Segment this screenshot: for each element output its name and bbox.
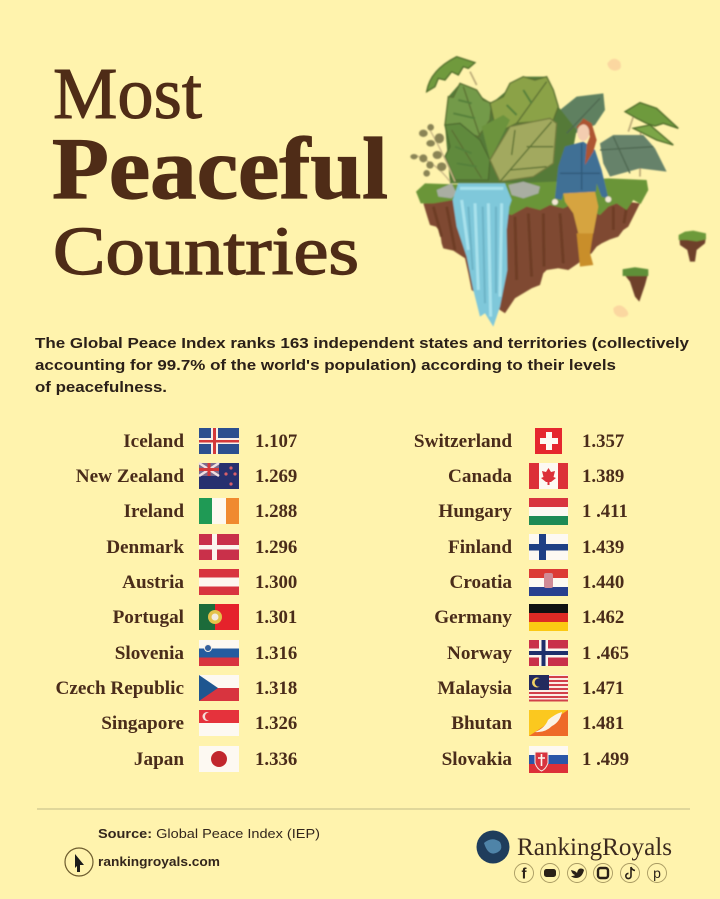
icon: pinterest — [648, 864, 666, 882]
big leaves — [445, 83, 492, 137]
icon: instagram — [594, 864, 612, 882]
waterfall — [453, 183, 512, 327]
row: Ireland — [124, 498, 297, 524]
row: Germany — [434, 604, 624, 631]
row: Hungary — [438, 498, 628, 525]
row: Canada: 1.389 — [582, 466, 624, 487]
row: Singapore — [101, 710, 297, 736]
row: Canada: Canada — [448, 466, 512, 487]
trousers — [563, 192, 598, 233]
row: Czech Republic — [56, 675, 297, 701]
intro text: accounting for 99.7% of the world's population) according to their levels — [35, 357, 616, 374]
leaf veins — [452, 82, 553, 182]
rocks — [437, 182, 540, 198]
icon: pinterest: p — [653, 865, 661, 881]
row: Bhutan: Bhutan — [451, 713, 512, 734]
title — [52, 53, 388, 289]
row: Switzerland — [414, 428, 624, 454]
brand name: RankingRoyals — [517, 834, 672, 861]
row: Czech Republic: 1.318 — [255, 678, 297, 699]
row: Slovakia: 1 .499 — [582, 749, 629, 770]
row: Denmark — [106, 534, 297, 560]
row: Czech Republic: Czech Republic — [56, 678, 184, 699]
row: Iceland: Iceland — [123, 431, 184, 452]
row: Bhutan: 1.481 — [582, 713, 624, 734]
icon: cursor — [65, 848, 93, 876]
icon: RankingRoyals globe logo — [476, 830, 510, 864]
row: Iceland — [123, 428, 297, 454]
back dark leaves — [560, 93, 605, 140]
blobs — [607, 59, 621, 71]
icon: facebook: f — [522, 866, 528, 882]
row: Slovakia: Slovakia — [442, 749, 512, 770]
title: Most — [53, 53, 202, 134]
row: Malaysia: 1.471 — [582, 678, 624, 699]
hair and face — [577, 118, 597, 165]
fan leaves — [470, 72, 641, 177]
footer rule — [37, 808, 690, 810]
row: Hungary: Hungary — [438, 501, 512, 522]
row: Japan: Japan — [134, 749, 184, 770]
row: Denmark: Denmark — [106, 537, 184, 558]
row: Norway — [447, 640, 629, 666]
row: Austria — [122, 569, 297, 595]
row: Portugal — [113, 604, 297, 630]
row: Portugal: 1.301 — [255, 607, 297, 628]
row: Norway: 1 .465 — [582, 643, 629, 664]
row: Croatia — [449, 569, 624, 596]
source: Source: Global Peace Index (IEP) — [98, 826, 320, 841]
intro text: The Global Peace Index ranks 163 independent states and territories (collectively — [35, 335, 690, 352]
icon: tiktok — [620, 864, 640, 882]
row: New Zealand: 1.269 — [255, 466, 297, 487]
row: Ireland: 1.288 — [255, 501, 297, 522]
row: Slovenia: 1.316 — [255, 643, 297, 664]
row: Bhutan — [451, 710, 624, 736]
small island right — [679, 237, 706, 262]
social icons — [514, 864, 666, 882]
row: Japan: 1.336 — [255, 749, 297, 770]
row: Singapore: Singapore — [101, 713, 184, 734]
row: Malaysia — [437, 675, 624, 701]
row: Denmark: 1.296 — [255, 537, 297, 558]
row: Croatia: 1.440 — [582, 572, 624, 593]
row: New Zealand — [76, 463, 297, 489]
row: Germany: Germany — [434, 607, 512, 628]
website: rankingroyals.com — [98, 854, 220, 869]
boots — [577, 232, 593, 267]
row: Austria: 1.300 — [255, 572, 297, 593]
intro text: of peacefulness. — [35, 379, 167, 396]
row: Slovenia — [115, 640, 297, 666]
icon: twitter — [568, 864, 586, 882]
intro text — [35, 335, 690, 396]
row: Hungary: 1 .411 — [582, 501, 628, 522]
icon: facebook — [514, 864, 534, 882]
row: Finland: 1.439 — [582, 537, 624, 558]
row: Germany: 1.462 — [582, 607, 624, 628]
jacket — [555, 142, 608, 200]
grass — [416, 178, 648, 215]
illustration: floating island with waterfall and woman — [410, 57, 706, 327]
row: Slovenia: Slovenia — [115, 643, 184, 664]
twigs — [415, 130, 455, 182]
title: Countries — [53, 213, 359, 289]
small island lower — [623, 273, 648, 302]
row: New Zealand: New Zealand — [76, 466, 184, 487]
row: Norway: Norway — [447, 643, 512, 664]
row: Portugal: Portugal — [113, 607, 184, 628]
island soil — [423, 190, 640, 313]
row: Ireland: Ireland — [124, 501, 184, 522]
row: Croatia: Croatia — [449, 572, 512, 593]
row: Switzerland: 1.357 — [582, 431, 624, 452]
row: Iceland: 1.107 — [255, 431, 297, 452]
row: Singapore: 1.326 — [255, 713, 297, 734]
row: Finland: Finland — [448, 537, 512, 558]
row: Finland — [448, 534, 624, 560]
row: Canada — [448, 463, 624, 489]
hands — [552, 199, 558, 205]
icon: youtube — [540, 864, 560, 882]
row: Austria: Austria — [122, 572, 184, 593]
row: Japan — [134, 746, 297, 772]
left ranking column — [56, 428, 297, 772]
right ranking column — [414, 428, 629, 773]
row: Slovakia — [442, 746, 629, 773]
row: Switzerland: Switzerland — [414, 431, 512, 452]
row: Malaysia: Malaysia — [437, 678, 512, 699]
title: Peaceful — [52, 121, 388, 218]
